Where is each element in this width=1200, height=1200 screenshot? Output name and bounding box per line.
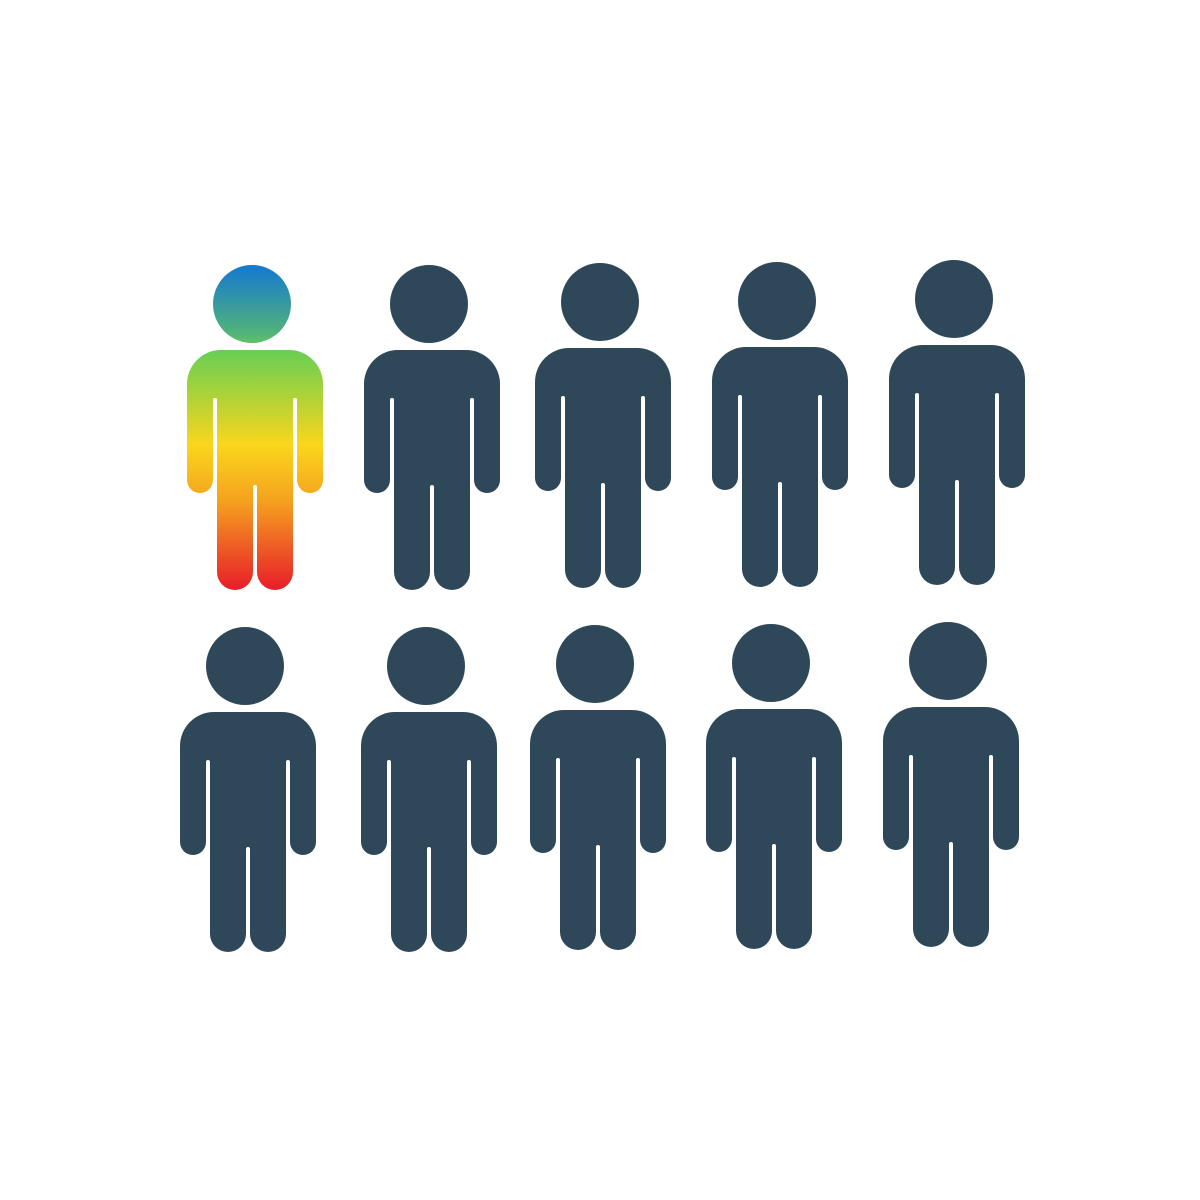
icon: highlighted person (rainbow gradient) [187,265,323,590]
icons: row 1 dark persons [364,260,1025,590]
icons: row 2 dark persons [180,622,1019,952]
